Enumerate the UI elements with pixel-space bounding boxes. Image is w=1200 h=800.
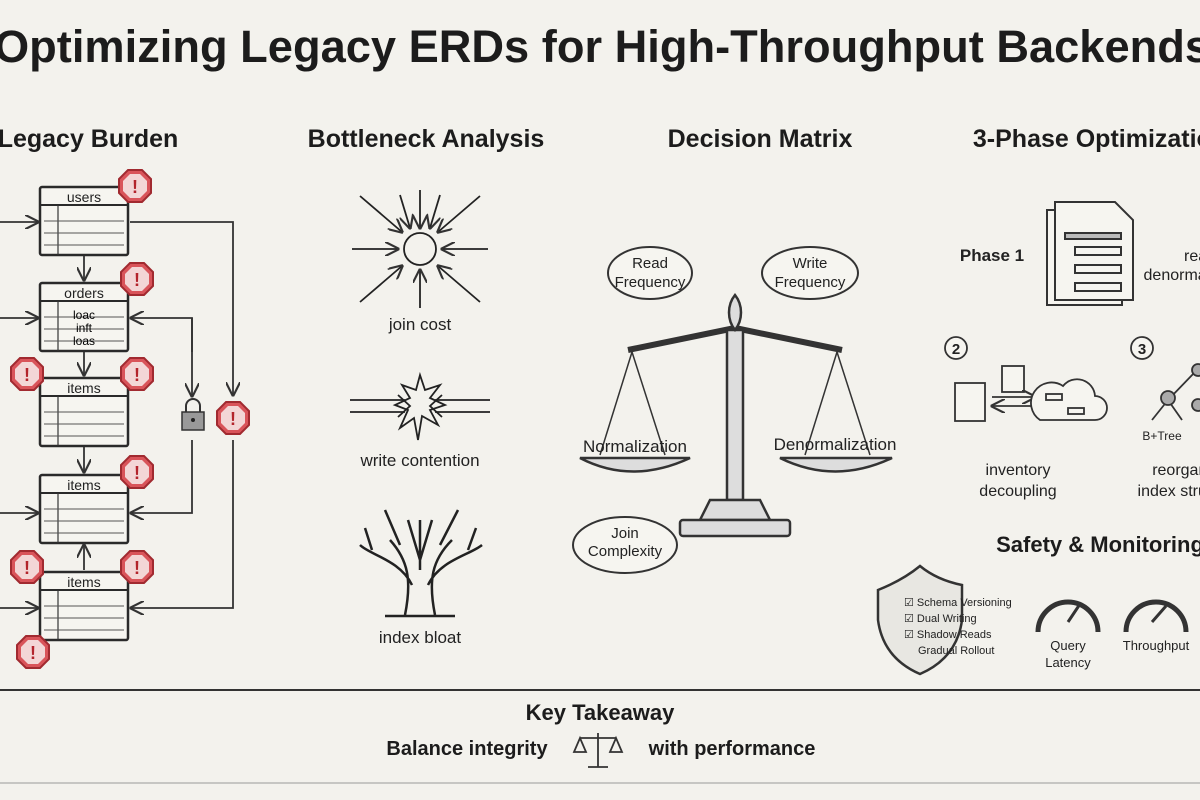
- title: Optimizing Legacy ERDs for High-Throughput Backends: [0, 21, 1200, 72]
- icon: document: [1047, 202, 1133, 305]
- callout: read frequency: Read: [632, 255, 668, 272]
- text: index bloat: [379, 628, 461, 647]
- panel: legacy ERD: [0, 170, 249, 668]
- callout: write frequency: Write: [793, 255, 827, 272]
- text: join cost: [388, 315, 451, 334]
- panel: legacy ERD: users: [67, 189, 101, 205]
- panel: decision matrix scale: [573, 247, 896, 573]
- icon: join cost: [352, 190, 488, 308]
- icon: step 2: 2: [952, 341, 960, 358]
- panel: 3-phase: B+Tree: [1142, 429, 1182, 443]
- icon: small scale: [574, 733, 622, 767]
- panel: decision matrix scale: Denormalization: [774, 435, 896, 454]
- callout: join complexity: Join: [611, 525, 639, 542]
- icon: step 3 b+tree: 3: [1138, 341, 1146, 358]
- panel: legacy ERD: loac: [73, 308, 95, 322]
- icon: gauge query latency: Query: [1050, 638, 1086, 653]
- panel: decision matrix scale: Normalization: [583, 437, 687, 456]
- icon: gauge throughput: [1123, 602, 1190, 653]
- callout: read frequency: [608, 247, 692, 299]
- icon: shield checklist: ☑ Schema Versioning: [904, 597, 1012, 609]
- panel: legacy ERD: orders: [64, 285, 104, 301]
- icon: shield checklist: Gradual Rollout: [918, 645, 994, 657]
- icon: gauge throughput: Throughput: [1123, 638, 1190, 653]
- callout: read frequency: Frequency: [615, 274, 686, 291]
- icon: shield checklist: ☑ Dual Writing: [904, 613, 977, 625]
- icon: lock: [182, 399, 204, 430]
- callout: write frequency: [762, 247, 858, 299]
- icon: shield checklist: ☑ Shadow Reads: [904, 629, 992, 641]
- panel: 3-phase: [945, 202, 1200, 500]
- panel: legacy ERD: inft: [76, 321, 93, 335]
- callout: write frequency: Frequency: [775, 274, 846, 291]
- callout: join complexity: [573, 517, 677, 573]
- icon: tree: [360, 510, 482, 616]
- heading: legacy burden: Legacy Burden: [0, 125, 178, 153]
- heading: safety & monitoring: Safety & Monitoring: [996, 532, 1200, 557]
- icon: step 2: [945, 337, 1107, 421]
- panel: 3-phase: Phase 1: [960, 246, 1024, 265]
- icon: shield checklist: [878, 566, 1012, 674]
- icon: gauge query latency: [1038, 602, 1098, 670]
- panel: bottlenecks: [350, 190, 490, 616]
- key takeaway: [386, 700, 815, 767]
- key takeaway: with performance: [648, 738, 815, 760]
- panel: 3-phase: inventory: [986, 462, 1050, 479]
- panel: 3-phase: decoupling: [979, 483, 1057, 500]
- panel: legacy ERD: loas: [73, 334, 95, 348]
- callout: join complexity: Complexity: [588, 543, 663, 560]
- key takeaway: Key Takeaway: [526, 700, 675, 725]
- heading: bottleneck analysis: Bottleneck Analysis: [308, 125, 544, 153]
- icon: gauge query latency: Latency: [1045, 655, 1091, 670]
- panel: legacy ERD: items: [67, 380, 101, 396]
- heading: decision matrix: Decision Matrix: [668, 125, 852, 153]
- icon: step 3 b+tree: [1131, 337, 1200, 420]
- text: write contention: [359, 451, 480, 470]
- panel: legacy ERD: items: [67, 574, 101, 590]
- panel: legacy ERD: items: [67, 477, 101, 493]
- key takeaway: Balance integrity: [386, 738, 548, 760]
- icon: write contention: [350, 375, 490, 440]
